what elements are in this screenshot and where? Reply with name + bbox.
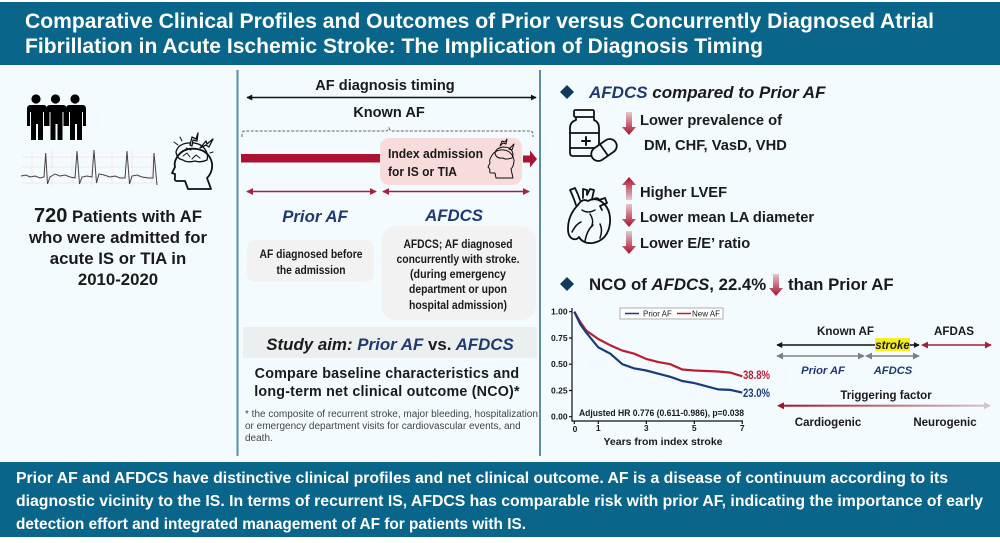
arrow: lower LA diameter: [622, 204, 636, 227]
callout: index admission: Index admission: [388, 147, 483, 161]
text: patient count: 720 Patients with AF: [34, 205, 202, 227]
arrow: timing: [247, 96, 536, 98]
text: study aim description: Compare baseline characteristics and: [255, 366, 519, 382]
label: AFDAS: AFDAS: [934, 325, 974, 338]
footnote: [245, 409, 538, 444]
arrow: lower E/E': [622, 231, 636, 254]
legend: New AF: [692, 310, 720, 318]
text: study aim description: long-term net clinical outcome (NCO)*: [254, 384, 520, 400]
chart: Kaplan-Meier curves: 3: [644, 423, 649, 433]
text: higher LVEF: Higher LVEF: [640, 185, 727, 201]
definition: AFDCS: concurrently with stroke.: [396, 254, 520, 266]
footnote: death.: [245, 433, 273, 444]
legend: [620, 308, 723, 319]
arrow: lower prevalence: [622, 112, 636, 135]
arrow: Prior AF span: [247, 190, 376, 192]
arrow: AFDCS span: [383, 190, 529, 192]
conclusion banner: [0, 462, 1000, 537]
arrow: AFDCS range: [866, 355, 919, 357]
heading: NCO of AFDCS: than Prior AF: [788, 275, 894, 294]
title banner: Fibrillation in Acute Ischemic Stroke: The Implication of Diagnosis Timing: [25, 35, 763, 58]
definition: AFDCS: [381, 226, 536, 320]
arrow: Known AF range: [777, 344, 919, 346]
definition: Prior AF: AF diagnosed before: [260, 249, 362, 261]
label: Cardiogenic: Cardiogenic: [795, 417, 862, 429]
arrow: timeline head: [523, 150, 537, 168]
callout: index admission: [380, 138, 522, 185]
conclusion banner: detection effort and integrated management of AF for patients with IS.: [16, 516, 526, 533]
chart: Kaplan-Meier curves: 0.00: [551, 412, 568, 422]
title banner: Comparative Clinical Profiles and Outcomes of Prior versus Concurrently Diagnosed Atrial: [25, 10, 934, 33]
footnote: * the composite of recurrent stroke, major bleeding, hospitalization: [245, 409, 538, 420]
icon: heart: [568, 188, 610, 243]
panel: results: [551, 83, 991, 448]
label: Prior AF: Prior AF: [282, 207, 349, 226]
text: patient count: acute IS or TIA in: [50, 249, 186, 268]
label: Neurogenic: Neurogenic: [913, 417, 977, 429]
definition: AFDCS: AFDCS; AF diagnosed: [404, 239, 512, 251]
series: New AF: [574, 312, 742, 376]
text: lower prevalence: [640, 113, 787, 154]
heading: NCO of AFDCS: NCO of AFDCS, 22.4%: [589, 275, 766, 294]
chart: Kaplan-Meier curves: 5: [692, 423, 697, 433]
definition: AFDCS: department or upon: [409, 284, 507, 296]
label: Known AF: Known AF: [817, 325, 874, 338]
definition: AFDCS: (during emergency: [410, 269, 507, 281]
series: Prior AF: [574, 312, 742, 393]
text: LA diameter: Lower mean LA diameter: [640, 210, 814, 226]
text: patient count: 2010-2020: [78, 270, 158, 289]
arrow: higher LVEF: [622, 177, 636, 200]
chart: Kaplan-Meier curves: 1.00: [551, 306, 568, 316]
conclusion banner: diagnostic vicinity to the IS. In terms of recurrent IS, AFDCS has comparable risk with prior AF, indicating the importance of early: [16, 493, 983, 510]
text: lower prevalence: Lower prevalence of: [640, 113, 782, 129]
chart: Kaplan-Meier curves: 0.75: [551, 333, 568, 343]
axis title: Years from index stroke: [603, 436, 723, 448]
label: Triggering factor: Triggering factor: [840, 390, 932, 402]
text: patient count: [28, 205, 208, 289]
chart: Kaplan-Meier curves: 7: [740, 423, 745, 433]
label: AFDCS: AFDCS: [873, 365, 913, 377]
text: E/E' ratio: Lower E/E’ ratio: [640, 236, 750, 252]
text: patient count: who were admitted for: [28, 228, 208, 247]
panel: patient population: [21, 94, 213, 289]
arrow: trigger gradient: [777, 402, 991, 409]
chart: Kaplan-Meier curves: 0.25: [551, 386, 568, 396]
chart: Kaplan-Meier curves: 0: [573, 424, 578, 434]
heading: study aim: Study aim: Prior AF vs. AFDCS: [266, 335, 514, 354]
bracket: Known AF span: [242, 128, 533, 137]
diagram: AF continuum: [777, 325, 991, 429]
definition: AFDCS: hospital admission): [409, 300, 507, 312]
text: lower prevalence: DM, CHF, VasD, VHD: [644, 138, 787, 154]
definition: Prior AF: [247, 240, 374, 282]
chart: Kaplan-Meier curves: [551, 306, 770, 448]
heading: AFDCS comparison: AFDCS compared to Prior AF: [588, 83, 826, 102]
arrow: AFDAS range: [922, 344, 991, 346]
label: Known AF: Known AF: [353, 105, 425, 121]
icon: head with brain and lightning: [172, 133, 213, 189]
chart: Kaplan-Meier curves: 0.50: [551, 359, 568, 369]
conclusion banner: Prior AF and AFDCS have distinctive clinical profiles and net clinical outcome. AF is a disease of continuum according to its: [16, 470, 948, 487]
chart: Kaplan-Meier curves: 1: [596, 423, 601, 433]
footnote: or emergency department visits for cardiovascular events, and: [245, 421, 521, 432]
heading: NCO of AFDCS: [560, 274, 894, 296]
legend: Prior AF: [643, 310, 672, 318]
icon: medicine bottle and pill: [570, 110, 619, 164]
definition: Prior AF: the admission: [276, 265, 346, 277]
chart: ECG strip: [21, 150, 158, 186]
heading: AF diagnosis timing: AF diagnosis timing: [315, 78, 455, 94]
panel: AF diagnosis timing: [241, 78, 538, 444]
title banner: [0, 2, 1000, 65]
label: Prior AF: Prior AF: [801, 365, 846, 377]
heading: study aim: [243, 327, 537, 358]
text: hazard ratio: Adjusted HR 0.776 (0.611-0.986), p=0.038: [579, 408, 744, 419]
value: Prior AF: 23.0%: [743, 386, 770, 400]
callout: index admission: for IS or TIA: [388, 165, 457, 179]
icon: three patients: [27, 94, 86, 140]
text: study aim description: [254, 366, 520, 400]
label: stroke: stroke: [875, 340, 910, 352]
value: New AF: 38.8%: [743, 368, 770, 382]
label: AFDCS: AFDCS: [424, 206, 484, 225]
bar: AF timeline: [241, 154, 380, 162]
arrow: Prior AF range: [777, 355, 864, 357]
icon: head small: [488, 139, 514, 178]
